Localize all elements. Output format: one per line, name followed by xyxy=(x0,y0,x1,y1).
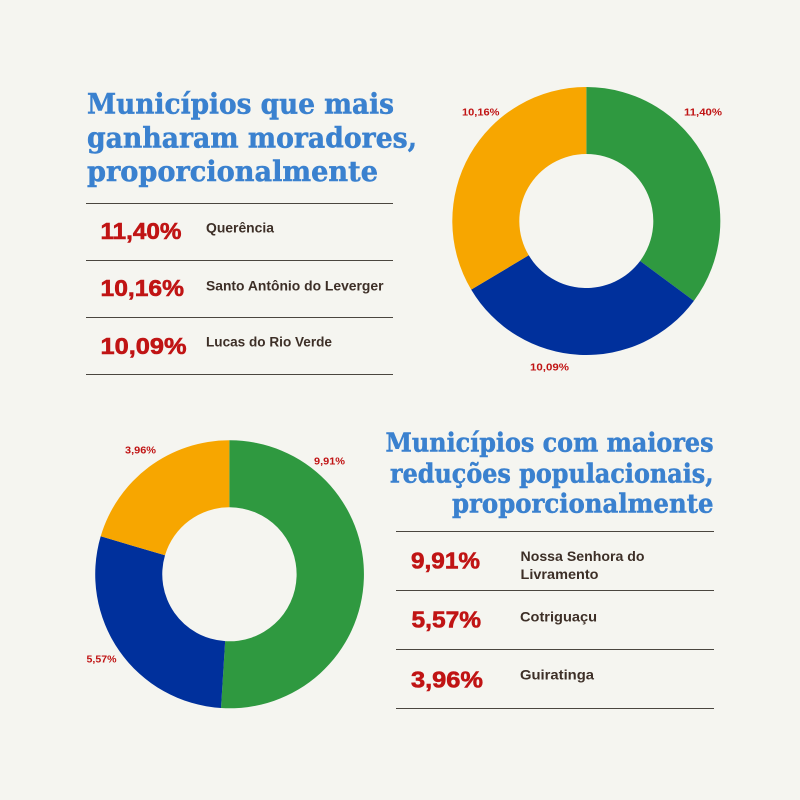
label: 10,16%: 10,16% xyxy=(462,106,500,118)
label: 9,91%: 9,91% xyxy=(314,456,346,468)
row: Lucas do Rio Verde: Lucas do Rio Verde xyxy=(206,334,332,350)
row: Nossa Senhora do Livramento: Nossa Senhora do xyxy=(520,549,644,564)
heading: population reductions: proporcionalmente xyxy=(452,489,714,519)
label: 11,40%: 11,40% xyxy=(684,106,723,118)
row: Guiratinga: 3,96% xyxy=(411,667,483,693)
heading: population reductions: reduções populacionais, xyxy=(390,459,714,489)
row: Cotriguaçu xyxy=(412,607,597,633)
row: Lucas do Rio Verde: 10,09% xyxy=(100,333,186,359)
row: Querência xyxy=(100,218,275,244)
heading: gained residents: ganharam moradores, xyxy=(87,122,417,154)
segment: 10,16% orange xyxy=(452,87,586,290)
row: Lucas do Rio Verde xyxy=(100,333,332,359)
row: Querência: 11,40% xyxy=(100,218,182,244)
segment: 10,09% blue xyxy=(471,255,694,355)
label: 10,09%: 10,09% xyxy=(530,362,570,374)
row: Nossa Senhora do Livramento: 9,91% xyxy=(411,548,480,574)
panel: municipalities with the largest population reductions xyxy=(386,429,714,708)
row: Cotriguaçu: Cotriguaçu xyxy=(520,610,597,625)
segment: 11,40% green xyxy=(586,87,720,301)
panel: municipalities that gained the most residents xyxy=(86,88,417,374)
segment: 5,57% blue xyxy=(95,536,225,708)
heading: population reductions: Municípios com maiores xyxy=(386,429,714,459)
heading: population reductions xyxy=(386,429,714,519)
row: Nossa Senhora do Livramento: Livramento xyxy=(520,567,598,582)
heading: gained residents: Municípios que mais xyxy=(87,88,394,120)
heading: gained residents: proporcionalmente xyxy=(87,155,378,188)
row: Cotriguaçu: 5,57% xyxy=(412,607,481,633)
donut chart: gained residents xyxy=(452,87,723,373)
segment: 3,96% orange xyxy=(101,440,229,555)
donut chart: population reductions xyxy=(86,440,364,708)
label: 3,96%: 3,96% xyxy=(125,444,157,456)
row: Santo Antônio do Leverger: 10,16% xyxy=(100,275,184,301)
row: Guiratinga: Guiratinga xyxy=(520,668,595,682)
row: Guiratinga xyxy=(411,667,595,693)
row: Santo Antônio do Leverger xyxy=(100,275,384,301)
row: Santo Antônio do Leverger: Santo Antônio do Leverger xyxy=(206,278,384,294)
label: 5,57%: 5,57% xyxy=(86,654,117,666)
row: Querência: Querência xyxy=(206,220,275,236)
row: Nossa Senhora do Livramento xyxy=(411,548,644,582)
segment: 9,91% green xyxy=(221,440,364,708)
heading: gained residents xyxy=(87,88,417,188)
